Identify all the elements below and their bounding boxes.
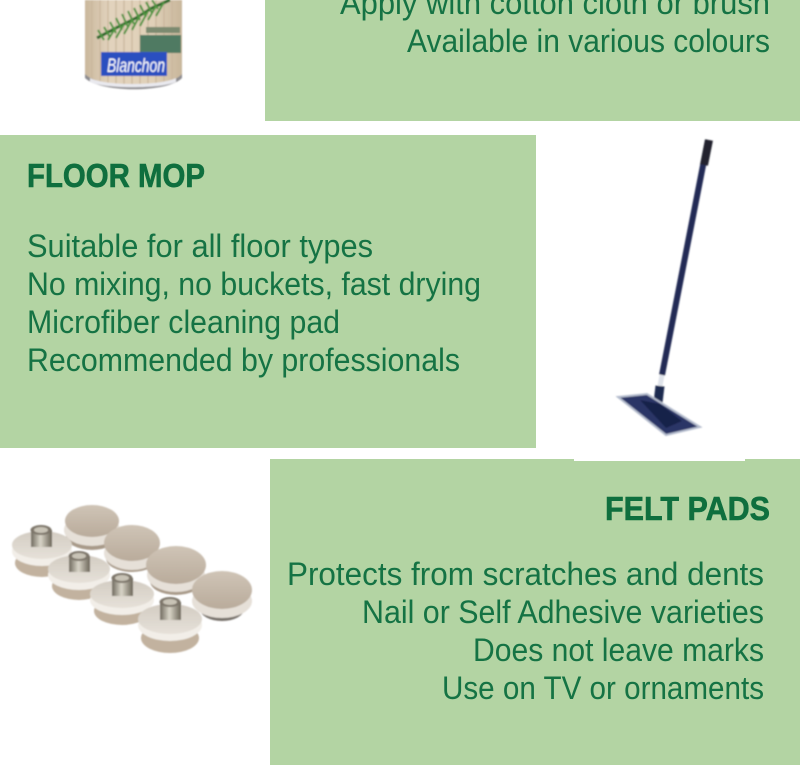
product image: floor mop [618,140,709,435]
product image: felt pads [12,505,252,653]
text: felt pads features: Use on TV or ornaments [442,670,764,706]
text: floor mop features [27,228,481,378]
text: felt pads features [287,556,764,706]
text: felt pads features: Nail or Self Adhesive varieties [362,594,764,630]
metal pad 1 [12,525,72,577]
text: top product features: Available in various colours [407,23,770,59]
text: felt pads features: Does not leave marks [473,632,764,668]
text: floor mop features: Recommended by professionals [27,342,460,378]
product image: wood oil can [85,0,182,89]
metal pad 2 [48,551,110,600]
felt pad 4 [192,571,252,621]
felt pad 2 [104,525,160,572]
icon: fir branch [97,0,170,40]
text: felt pads features: Protects from scratches and dents [287,556,764,592]
panel: floor mop [0,135,536,448]
metal pad 4 [138,597,202,653]
heading: floor mop: FLOOR MOP [27,157,205,194]
panel: felt pads [270,459,800,765]
text: floor mop features: Microfiber cleaning pad [27,304,340,340]
panel: top product details [265,0,800,121]
heading: felt pads: FELT PADS [605,490,770,527]
text: top product features [340,0,770,59]
felt pad 1 [64,505,120,550]
product image: wood oil can: Blanchon [107,56,165,77]
felt pad 3 [146,546,206,595]
text: floor mop features: No mixing, no buckets, fast drying [27,266,481,302]
metal pad 3 [90,573,154,625]
text: floor mop features: Suitable for all floor types [27,228,373,264]
